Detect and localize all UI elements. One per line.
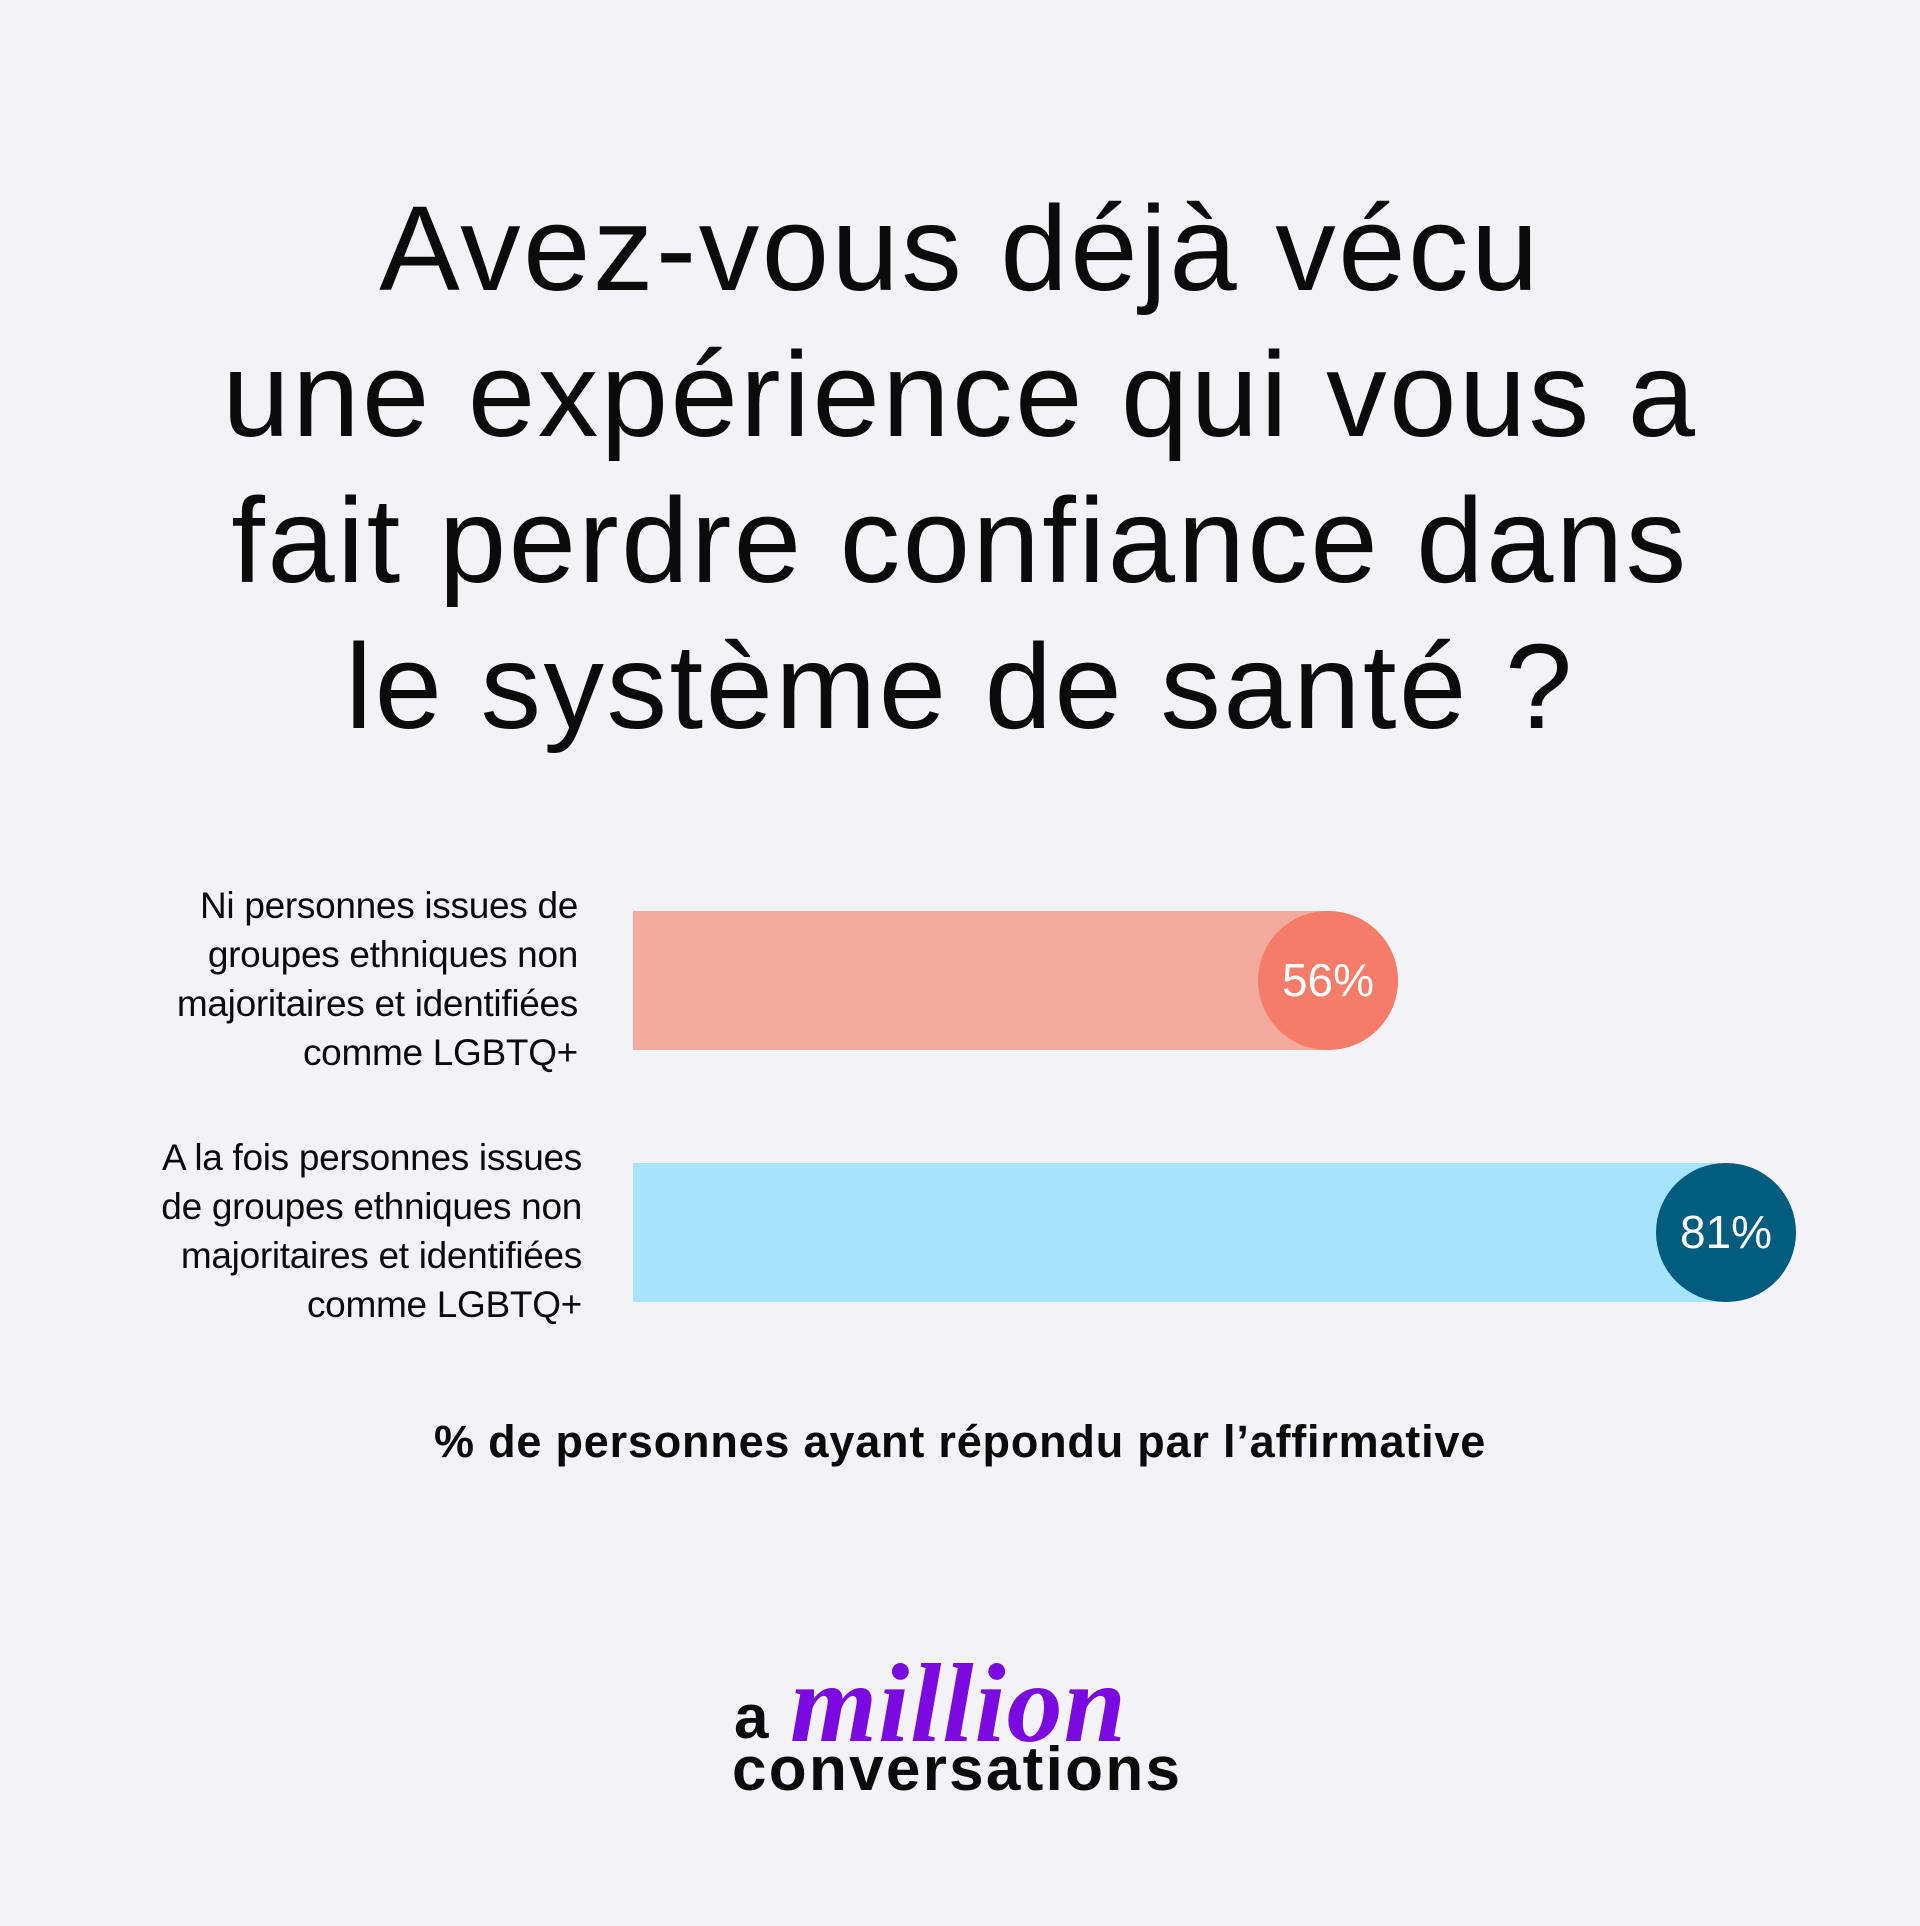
logo: million xyxy=(790,1642,1127,1766)
value badge 56% xyxy=(1258,911,1398,1050)
label: bar 2: A la fois personnes issues xyxy=(162,1137,582,1178)
value badge 56%: 56% xyxy=(1282,954,1374,1006)
value badge 81% xyxy=(1656,1163,1796,1302)
label: bar 1 xyxy=(177,885,578,1073)
label: bar 2 xyxy=(161,1137,582,1325)
label: bar 1: Ni personnes issues de xyxy=(200,885,578,926)
label: bar 1: groupes ethniques non xyxy=(208,934,578,975)
label: bar 2: de groupes ethniques non xyxy=(161,1186,582,1227)
label: bar 1: majoritaires et identifiées xyxy=(177,983,578,1024)
title: une expérience qui vous a xyxy=(222,326,1698,462)
logo: a xyxy=(734,1683,768,1752)
title xyxy=(222,180,1698,754)
title: fait perdre confiance dans xyxy=(231,472,1689,608)
title: le système de santé ? xyxy=(345,618,1575,754)
axis caption: % de personnes ayant répondu par l’affirmative xyxy=(434,1416,1486,1467)
label: bar 1: comme LGBTQ+ xyxy=(303,1032,578,1073)
logo xyxy=(732,1642,1182,1804)
bar 1: 56% xyxy=(633,911,1398,1050)
label: bar 2: comme LGBTQ+ xyxy=(307,1284,582,1325)
value badge 81%: 81% xyxy=(1680,1206,1772,1258)
logo: conversations xyxy=(732,1735,1182,1804)
bar 2: 81% xyxy=(633,1163,1796,1302)
label: bar 2: majoritaires et identifiées xyxy=(181,1235,582,1276)
title: Avez-vous déjà vécu xyxy=(379,180,1541,316)
